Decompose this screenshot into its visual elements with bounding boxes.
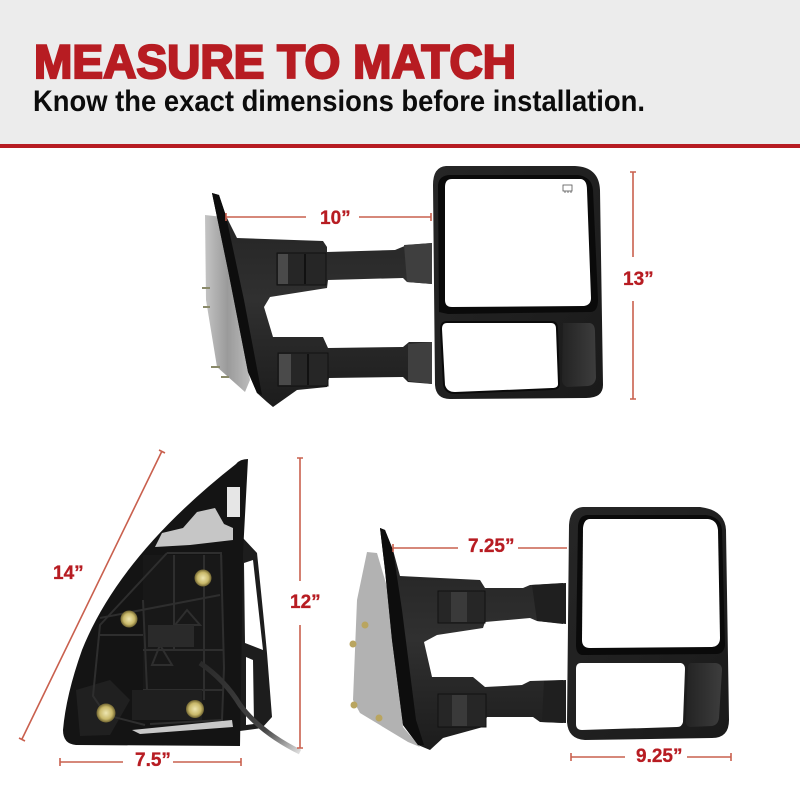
dimension: 7.25 inch <box>393 536 567 557</box>
dimension: 7.5 inch <box>60 750 241 771</box>
dimension: 13 inch <box>623 172 654 399</box>
mirror: back view <box>63 459 300 752</box>
header band <box>0 0 800 148</box>
dimension: 14 inch: 14” <box>53 563 84 584</box>
mirror: top view <box>202 166 603 407</box>
dimension: 13 inch: 13” <box>623 269 654 290</box>
dimension: 9.25 inch <box>571 746 731 767</box>
subtitle: Know the exact dimensions before installation. <box>33 85 645 118</box>
dimension: 12 inch: 12” <box>290 592 321 613</box>
dimension: 10 inch <box>226 208 431 229</box>
dimension: 7.25 inch: 7.25” <box>468 536 514 557</box>
dimension: 14 inch <box>19 450 165 741</box>
dimension: 9.25 inch: 9.25” <box>636 746 682 767</box>
dimension: 12 inch <box>290 458 321 748</box>
dimension: 10 inch: 10” <box>320 208 351 229</box>
icon: defrost symbol <box>563 185 572 193</box>
title: MEASURE TO MATCH <box>34 35 516 88</box>
dimension: 7.5 inch: 7.5” <box>135 750 171 771</box>
mirror: angled view <box>350 507 729 750</box>
